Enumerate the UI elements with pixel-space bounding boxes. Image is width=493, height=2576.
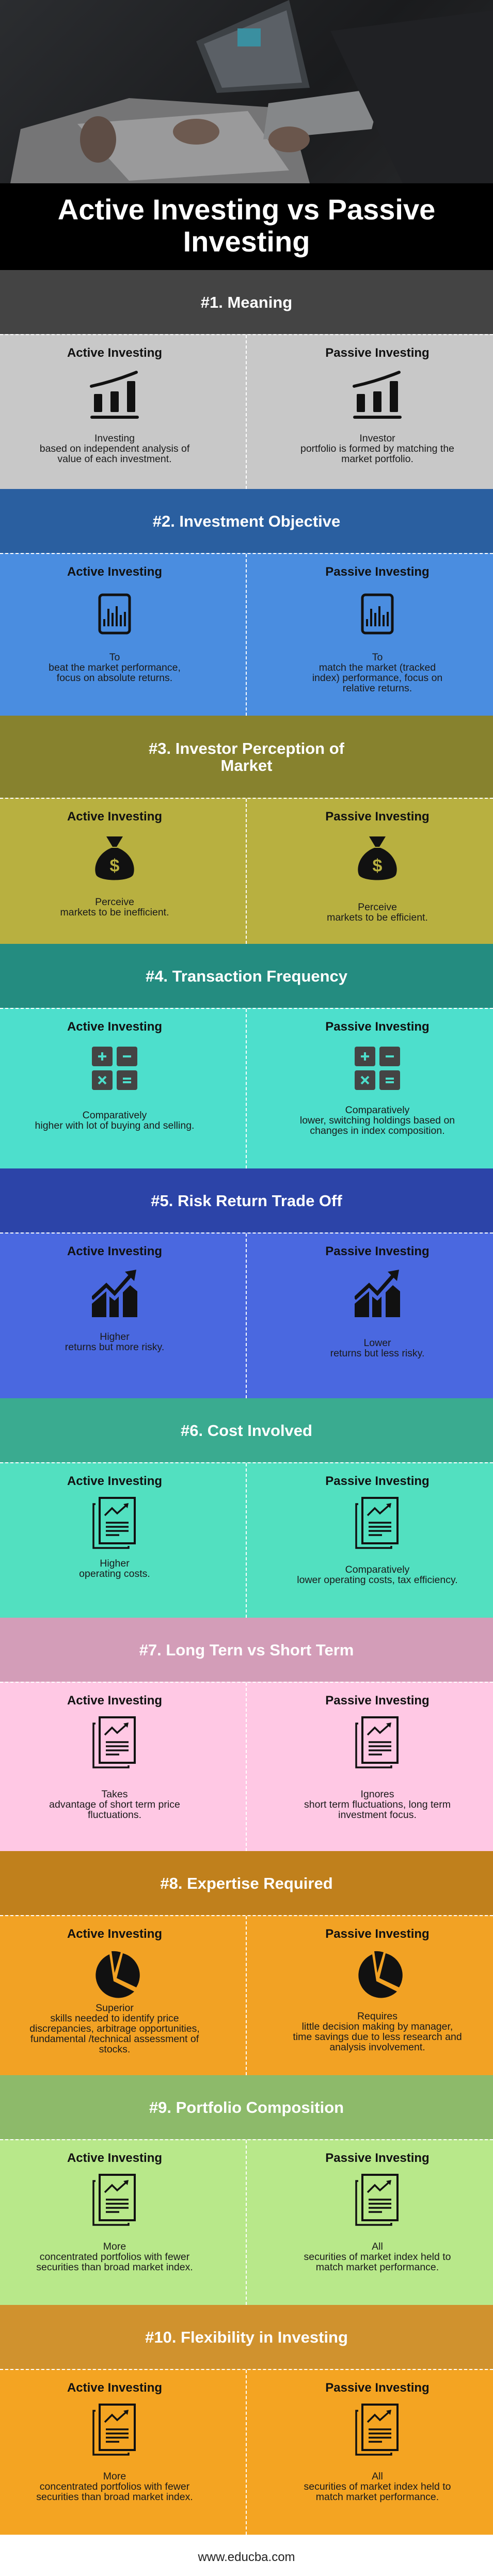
active column — [36, 2151, 193, 2273]
active column: concentrated portfolios with fewer — [40, 2481, 189, 2492]
active column: Perceive — [95, 896, 134, 908]
section 5 header: #5. Risk Return Trade Off — [151, 1192, 342, 1209]
icon: calculator — [92, 1047, 137, 1090]
passive column: Passive Investing — [325, 1474, 430, 1488]
section 10 content — [0, 2369, 493, 2535]
section 1 header — [0, 270, 493, 334]
passive column: changes in index composition. — [310, 1125, 445, 1136]
active column: Takes — [102, 1789, 128, 1800]
section 4 content — [0, 1008, 493, 1168]
active column — [65, 1244, 164, 1353]
active column — [49, 565, 181, 684]
section 10 header — [0, 2305, 493, 2369]
icon: money bag — [358, 836, 397, 880]
passive column: Passive Investing — [325, 1244, 430, 1258]
active column: fluctuations. — [88, 1809, 141, 1821]
icon: pie chart — [358, 1951, 403, 1998]
active column: stocks. — [99, 2044, 130, 2055]
icon: bar chart — [353, 371, 402, 419]
passive column: Passive Investing — [325, 1694, 430, 1708]
active column: based on independent analysis of — [40, 443, 189, 454]
active column — [36, 2381, 193, 2503]
passive column: Passive Investing — [325, 1927, 430, 1941]
icon: document chart — [355, 2404, 399, 2456]
active column — [35, 1020, 194, 1131]
active column: Active Investing — [67, 346, 162, 360]
section 7 header: #7. Long Tern vs Short Term — [139, 1641, 354, 1658]
active column — [67, 1474, 162, 1579]
passive column — [297, 1474, 458, 1586]
section 7 content — [0, 1682, 493, 1851]
passive column: Perceive — [358, 902, 397, 913]
active column: Active Investing — [67, 1244, 162, 1258]
passive column: securities of market index held to — [304, 2481, 451, 2492]
section 8 content — [0, 1915, 493, 2075]
passive column: market portfolio. — [341, 453, 414, 465]
passive column: lower operating costs, tax efficiency. — [297, 1574, 458, 1586]
active column: advantage of short term price — [49, 1799, 180, 1810]
active column: fundamental /technical assessment of — [30, 2033, 199, 2045]
passive column — [325, 810, 430, 923]
section 4 header: #4. Transaction Frequency — [146, 967, 347, 985]
section 5 content — [0, 1232, 493, 1398]
hero photo — [0, 0, 493, 183]
passive column: Passive Investing — [325, 2151, 430, 2165]
active column: concentrated portfolios with fewer — [40, 2251, 189, 2263]
section 6 header: #6. Cost Involved — [181, 1421, 312, 1440]
active column: More — [103, 2241, 126, 2252]
section 3 header: Market — [221, 756, 272, 775]
active column: Higher — [100, 1558, 130, 1569]
footer: www.educba.com — [198, 2550, 295, 2564]
active column: skills needed to identify price — [50, 2013, 179, 2024]
active column: markets to be inefficient. — [60, 907, 169, 918]
section 2 header — [0, 489, 493, 553]
icon: calculator — [355, 1047, 400, 1090]
passive column: All — [372, 2471, 383, 2482]
passive column: Lower — [363, 1337, 391, 1349]
icon: document chart — [92, 1497, 136, 1549]
section 2 header: #2. Investment Objective — [153, 512, 340, 530]
section 8 header: #8. Expertise Required — [160, 1874, 333, 1892]
section 9 content — [0, 2139, 493, 2305]
section 10 header: #10. Flexibility in Investing — [145, 2328, 348, 2346]
passive column — [304, 1694, 451, 1821]
icon: money bag — [95, 836, 134, 880]
passive column: Passive Investing — [325, 810, 430, 824]
icon: bar chart — [90, 371, 139, 419]
section 3 header: #3. Investor Perception of — [149, 739, 344, 757]
passive column: Investor — [359, 433, 395, 444]
active column: focus on absolute returns. — [57, 672, 172, 684]
icon: pie chart — [96, 1951, 140, 1998]
active column: returns but more risky. — [65, 1341, 164, 1353]
icon: money bag: $ — [110, 856, 120, 876]
active column: Active Investing — [67, 1020, 162, 1034]
active column: value of each investment. — [57, 453, 172, 465]
icon: document chart — [92, 2174, 136, 2226]
passive column — [300, 346, 454, 465]
active column — [60, 810, 169, 918]
passive column: Passive Investing — [325, 1020, 430, 1034]
active column: Active Investing — [67, 810, 162, 824]
section 1 content — [0, 334, 493, 489]
passive column: Ignores — [360, 1789, 394, 1800]
active column: To — [109, 652, 120, 663]
icon: money bag: $ — [373, 856, 383, 876]
section 1 header: #1. Meaning — [201, 293, 292, 311]
active column: More — [103, 2471, 126, 2482]
icon: monitor chart — [361, 594, 393, 634]
passive column: Comparatively — [345, 1564, 409, 1575]
active column: Higher — [100, 1331, 130, 1342]
passive column: All — [372, 2241, 383, 2252]
icon: monitor chart — [98, 594, 131, 634]
passive column — [293, 1927, 462, 2053]
passive column: match market performance. — [316, 2491, 439, 2503]
icon: growth chart — [355, 1270, 400, 1317]
passive column: analysis involvement. — [329, 2042, 425, 2053]
active column: higher with lot of buying and selling. — [35, 1120, 194, 1131]
passive column: investment focus. — [338, 1809, 417, 1821]
passive column: securities of market index held to — [304, 2251, 451, 2263]
active column: operating costs. — [79, 1568, 150, 1579]
passive column: returns but less risky. — [330, 1348, 424, 1359]
active column: Active Investing — [67, 2381, 162, 2395]
active column: Active Investing — [67, 2151, 162, 2165]
passive column: little decision making by manager, — [302, 2021, 453, 2032]
section 2 content — [0, 553, 493, 716]
passive column: relative returns. — [343, 683, 412, 694]
section 5 header — [0, 1168, 493, 1232]
active column: Active Investing — [67, 1474, 162, 1488]
active column: discrepancies, arbitrage opportunities, — [29, 2023, 200, 2034]
passive column: match market performance. — [316, 2262, 439, 2273]
active column: Comparatively — [83, 1110, 147, 1121]
section 6 header — [0, 1398, 493, 1462]
passive column: Comparatively — [345, 1104, 409, 1116]
passive column: Requires — [357, 2011, 397, 2022]
passive column — [304, 2381, 451, 2503]
section 9 header: #9. Portfolio Composition — [149, 2098, 344, 2116]
title: Investing — [183, 225, 310, 258]
section 8 header — [0, 1851, 493, 1915]
icon: document chart — [92, 2404, 136, 2456]
icon: document chart — [355, 1716, 399, 1768]
passive column: match the market (tracked — [319, 662, 436, 673]
passive column: Passive Investing — [325, 2381, 430, 2395]
section 4 header — [0, 944, 493, 1008]
passive column: short term fluctuations, long term — [304, 1799, 451, 1810]
active column — [40, 346, 190, 465]
passive column: portfolio is formed by matching the — [300, 443, 454, 454]
active column: beat the market performance, — [49, 662, 181, 673]
passive column: time savings due to less research and — [293, 2031, 462, 2043]
section 3 content — [0, 798, 493, 944]
passive column: markets to be efficient. — [327, 912, 428, 923]
icon: document chart — [355, 1497, 399, 1549]
icon: document chart — [92, 1716, 136, 1768]
active column — [49, 1694, 180, 1821]
active column: Active Investing — [67, 1927, 162, 1941]
active column: Investing — [94, 433, 135, 444]
passive column: Passive Investing — [325, 346, 430, 360]
passive column: Passive Investing — [325, 565, 430, 579]
section 3 header — [0, 716, 493, 798]
active column: Superior — [96, 2002, 134, 2014]
active column: securities than broad market index. — [36, 2262, 193, 2273]
passive column: index) performance, focus on — [312, 672, 442, 684]
section 9 header — [0, 2075, 493, 2139]
passive column — [300, 1020, 455, 1136]
passive column — [312, 565, 442, 694]
active column — [29, 1927, 200, 2055]
icon: document chart — [355, 2174, 399, 2226]
passive column — [325, 1244, 430, 1359]
active column: Active Investing — [67, 1694, 162, 1708]
passive column — [304, 2151, 451, 2273]
passive column: lower, switching holdings based on — [300, 1115, 455, 1126]
active column: securities than broad market index. — [36, 2491, 193, 2503]
active column: Active Investing — [67, 565, 162, 579]
title: Active Investing vs Passive — [58, 193, 435, 226]
icon: growth chart — [92, 1270, 137, 1317]
passive column: To — [372, 652, 383, 663]
title — [0, 183, 493, 270]
section 7 header — [0, 1618, 493, 1682]
section 6 content — [0, 1462, 493, 1618]
